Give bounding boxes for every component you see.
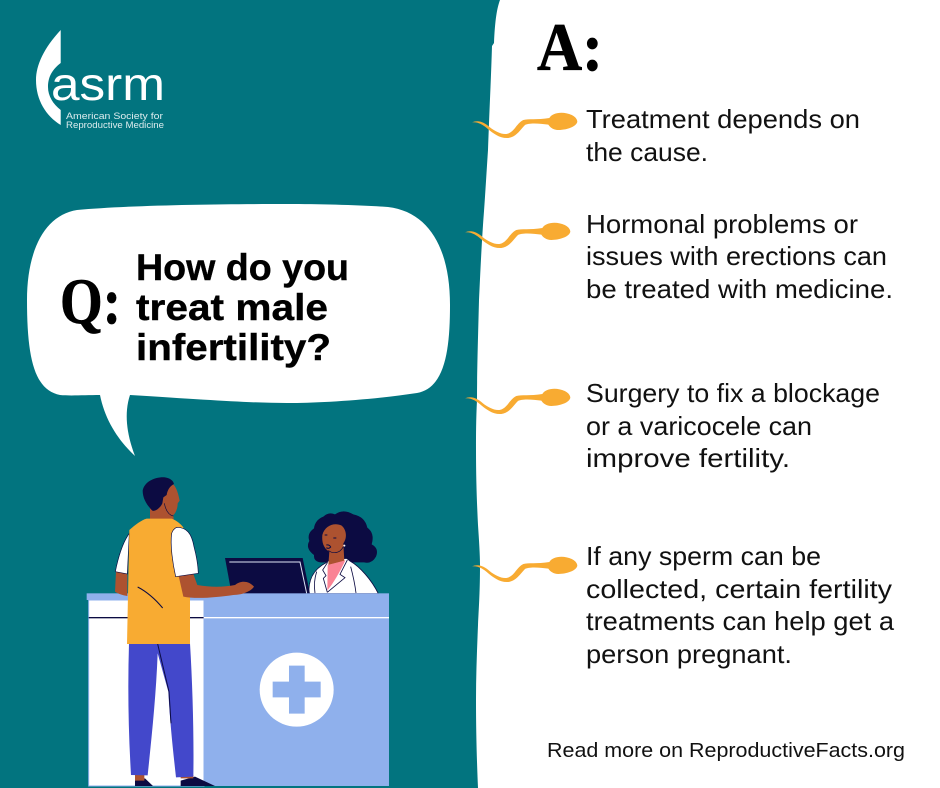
patient hair [143, 477, 174, 511]
answer text: If any sperm can be [586, 541, 821, 571]
answer text: Hormonal problems or [586, 209, 858, 239]
receptionist face details [325, 535, 336, 548]
patient head [143, 477, 180, 525]
answer text: improve fertility. [586, 443, 790, 473]
desk white side [89, 600, 204, 786]
desk blue front [204, 593, 389, 786]
answer text: Treatment depends on [586, 104, 860, 134]
coat lapels [314, 560, 356, 593]
Q label: Q: [60, 266, 121, 338]
logo crescent [36, 30, 61, 125]
medical cross icon [260, 653, 334, 727]
answer text: the cause. [586, 137, 708, 167]
patient forearm [179, 574, 254, 598]
footer link text: Read more on ReproductiveFacts.org [547, 739, 905, 762]
receptionist earring [343, 545, 345, 547]
icon: sperm [465, 389, 570, 414]
patient vest [127, 519, 190, 644]
receptionist pink shirt [327, 560, 345, 590]
receptionist [308, 511, 378, 594]
desk front line [204, 617, 389, 618]
vest pocket line [138, 587, 163, 608]
answer 2 [465, 209, 893, 304]
desk [87, 593, 389, 786]
answer text [586, 541, 895, 669]
patient trousers [128, 643, 194, 777]
logo subtitle: Reproductive Medicine [66, 120, 164, 131]
logo subtitle: American Society for [66, 111, 163, 122]
receptionist hair [308, 511, 377, 563]
logo wordmark: asrm [51, 58, 165, 110]
question text: infertility? [136, 327, 331, 368]
answer 1 [472, 104, 860, 167]
trouser crease [158, 644, 171, 723]
answer text: collected, certain fertility [586, 574, 892, 604]
illustration: patient at clinic reception desk [87, 477, 389, 786]
white answer panel [476, 0, 940, 788]
patient face and neck [150, 483, 180, 525]
question text: treat male [136, 287, 328, 328]
answer text [586, 378, 880, 473]
patient ankles [135, 773, 193, 781]
answer text: person pregnant. [586, 639, 792, 669]
answer text: or a varicocele can [586, 411, 812, 441]
answer text [586, 209, 893, 304]
logo subtitle [66, 111, 164, 131]
answer text: treatments can help get a [586, 606, 895, 636]
desk side line [89, 617, 204, 618]
icon: sperm [472, 557, 577, 582]
speech bubble with question [27, 204, 450, 456]
answer text: Surgery to fix a blockage [586, 378, 880, 408]
patient [115, 477, 254, 786]
question text [136, 247, 349, 368]
patient shoes [135, 777, 215, 786]
patient jaw line [164, 503, 173, 516]
icon: sperm [465, 223, 570, 248]
receptionist jaw line [328, 547, 343, 553]
icon: sperm [472, 113, 577, 138]
question text: How do you [136, 247, 349, 288]
patient back arm [115, 572, 127, 596]
answer 3 [465, 378, 880, 473]
receptionist coat [309, 558, 378, 594]
receptionist face and neck [322, 524, 346, 565]
computer monitor [225, 558, 310, 594]
bubble shape [27, 204, 450, 456]
answer 4 [472, 541, 895, 669]
answer text [586, 104, 860, 167]
answer text: issues with erections can [586, 241, 887, 271]
desk top [87, 593, 204, 600]
answer text: be treated with medicine. [586, 274, 893, 304]
monitor highlight [229, 562, 307, 593]
patient right sleeve [171, 527, 198, 577]
patient left sleeve [115, 533, 129, 574]
logo: ASRM [36, 30, 165, 131]
answer heading: A: [537, 9, 603, 85]
